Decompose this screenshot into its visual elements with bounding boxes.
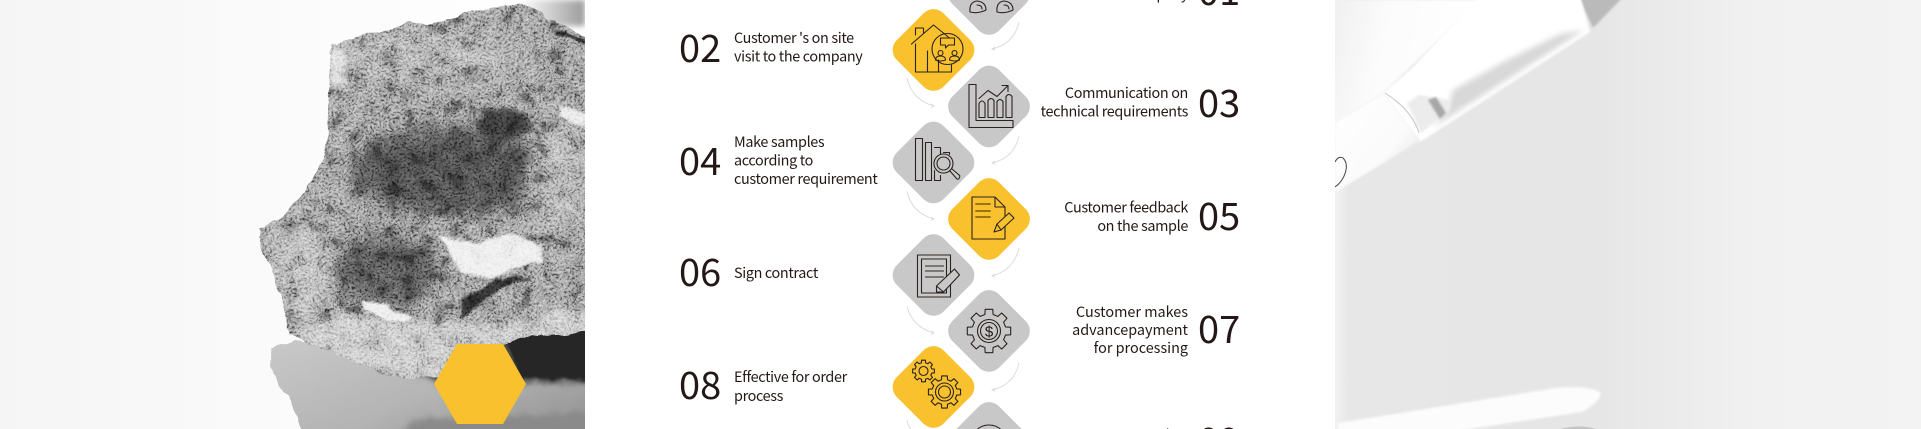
step 08: Effective for order bbox=[734, 366, 848, 387]
step 06 bbox=[679, 228, 980, 334]
step 07: advancepayment bbox=[1072, 319, 1189, 340]
icon: contract with pencil bbox=[918, 255, 960, 297]
left background bbox=[0, 0, 585, 429]
step 04 bbox=[679, 116, 980, 220]
step 08: process bbox=[734, 385, 784, 406]
icon: document with pencil bbox=[972, 197, 1014, 239]
step 02: 02 bbox=[679, 18, 721, 73]
photo: stacked rocks bbox=[255, 0, 595, 429]
step 07: Customer makes bbox=[1076, 301, 1188, 322]
step 07: 07 bbox=[1198, 299, 1240, 354]
white central panel bbox=[585, 0, 1335, 429]
icon: bars with magnifier bbox=[916, 138, 960, 180]
step 08 bbox=[679, 340, 980, 429]
step 03 bbox=[942, 60, 1240, 165]
step 07 bbox=[942, 284, 1240, 392]
step 01 bbox=[942, 0, 1240, 51]
step 06: 06 bbox=[679, 242, 721, 297]
step 05: on the sample bbox=[1097, 215, 1188, 236]
step 04: customer requirement bbox=[734, 168, 878, 189]
step 05: Customer feedback bbox=[1064, 196, 1188, 218]
step 03: 03 bbox=[1198, 73, 1240, 128]
step 02 bbox=[679, 3, 980, 107]
step 05 bbox=[942, 172, 1240, 278]
step 06: Sign contract bbox=[734, 262, 819, 283]
step 03: Communication on bbox=[1065, 82, 1188, 103]
step 02: Customer 's on site bbox=[734, 27, 854, 48]
step 08: 08 bbox=[679, 355, 721, 410]
photo: paint brushes bbox=[1335, 0, 1624, 429]
icon: gear with dollar sign: $ bbox=[985, 324, 994, 340]
step 03: technical requirements bbox=[1041, 100, 1189, 122]
icon: house with people bbox=[912, 25, 963, 72]
icon: rising bar chart bbox=[969, 84, 1013, 128]
yellow hexagon bbox=[434, 344, 526, 424]
icon: two gears bbox=[913, 360, 961, 408]
step 04: Make samples bbox=[734, 131, 825, 152]
step 04: 04 bbox=[679, 131, 721, 186]
step 07: for processing bbox=[1094, 337, 1188, 358]
step 05: 05 bbox=[1198, 186, 1240, 241]
step 04: according to bbox=[734, 150, 813, 170]
right background bbox=[1335, 0, 1921, 429]
step 02: visit to the company bbox=[734, 46, 863, 66]
icon: gear with dollar sign bbox=[967, 309, 1011, 353]
step 09 bbox=[942, 396, 1240, 429]
